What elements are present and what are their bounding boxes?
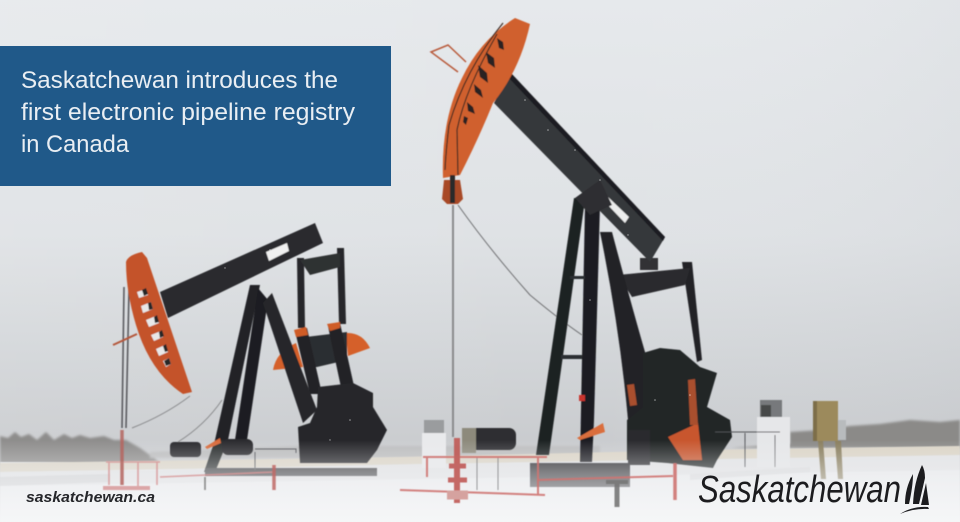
- logo wordmark: Saskatchewan: [698, 469, 901, 511]
- rear frame posts: [297, 248, 346, 328]
- title text: in Canada: [21, 131, 130, 158]
- distant tree lines: [0, 420, 960, 465]
- snow-covered ground: [0, 446, 960, 522]
- Saskatchewan logo: [698, 465, 929, 514]
- beam decal: [266, 243, 289, 261]
- title text: [21, 67, 355, 158]
- title text: first electronic pipeline registry: [21, 99, 355, 126]
- polished rod: [452, 205, 454, 437]
- orange crank guard: [668, 423, 702, 460]
- orange caps: [294, 322, 340, 337]
- leg braces: [561, 276, 585, 359]
- fog fading the lower photo: [0, 440, 960, 522]
- hanger bar: [113, 334, 137, 345]
- horsehead: [443, 18, 530, 178]
- box posts: [818, 441, 843, 479]
- crank arms: [295, 323, 354, 394]
- railing: [715, 432, 780, 467]
- polished rod: [122, 287, 129, 428]
- white control cabinet: [757, 417, 790, 467]
- grey box: [838, 420, 846, 440]
- rear leg: [600, 232, 650, 420]
- horsehead: [126, 252, 192, 394]
- tan electrical box: [813, 401, 838, 441]
- red wellhead piping: large: [400, 438, 675, 507]
- logo wheat mark: [900, 465, 929, 514]
- red wellhead piping: small: [103, 430, 275, 490]
- gearbox: [627, 348, 732, 468]
- saddle: [575, 180, 612, 215]
- counterweight: orange right: [346, 333, 370, 356]
- small red valve: [579, 395, 585, 401]
- carrier bar: [442, 180, 463, 204]
- gearbox: [298, 383, 387, 463]
- equipment tank: [465, 428, 516, 450]
- counterweight: orange left: [273, 343, 303, 370]
- horsehead slots: [463, 38, 504, 125]
- small white cabinet centre: [422, 433, 446, 468]
- windsock: [205, 438, 221, 449]
- crank center: [306, 332, 347, 367]
- title text: Saskatchewan introduces the: [21, 67, 338, 94]
- left leg: [536, 198, 585, 455]
- base skid: [205, 468, 377, 476]
- walking beam: [160, 223, 323, 318]
- center leg: [580, 205, 600, 462]
- cross bar: [300, 253, 340, 275]
- walking beam: [494, 72, 665, 262]
- windsock: [577, 423, 605, 440]
- field equipment at right: [422, 400, 846, 480]
- equalizer arm: [682, 262, 702, 362]
- small pump jack: [113, 223, 387, 476]
- legs: [215, 285, 260, 440]
- base platform: [690, 467, 810, 480]
- electric cable: [458, 205, 582, 335]
- title panel: [0, 46, 391, 186]
- beam decal: [604, 195, 629, 223]
- cables to well: [132, 396, 222, 442]
- horsehead slots: [137, 289, 171, 367]
- horsehead outer rib: [445, 23, 503, 175]
- hanger frame: [431, 45, 466, 72]
- big pump jack: [431, 18, 732, 487]
- snowflake speckles: [224, 99, 691, 441]
- skid: [530, 463, 630, 487]
- website URL: saskatchewan.ca: [26, 489, 155, 506]
- equipment tanks: [170, 442, 201, 457]
